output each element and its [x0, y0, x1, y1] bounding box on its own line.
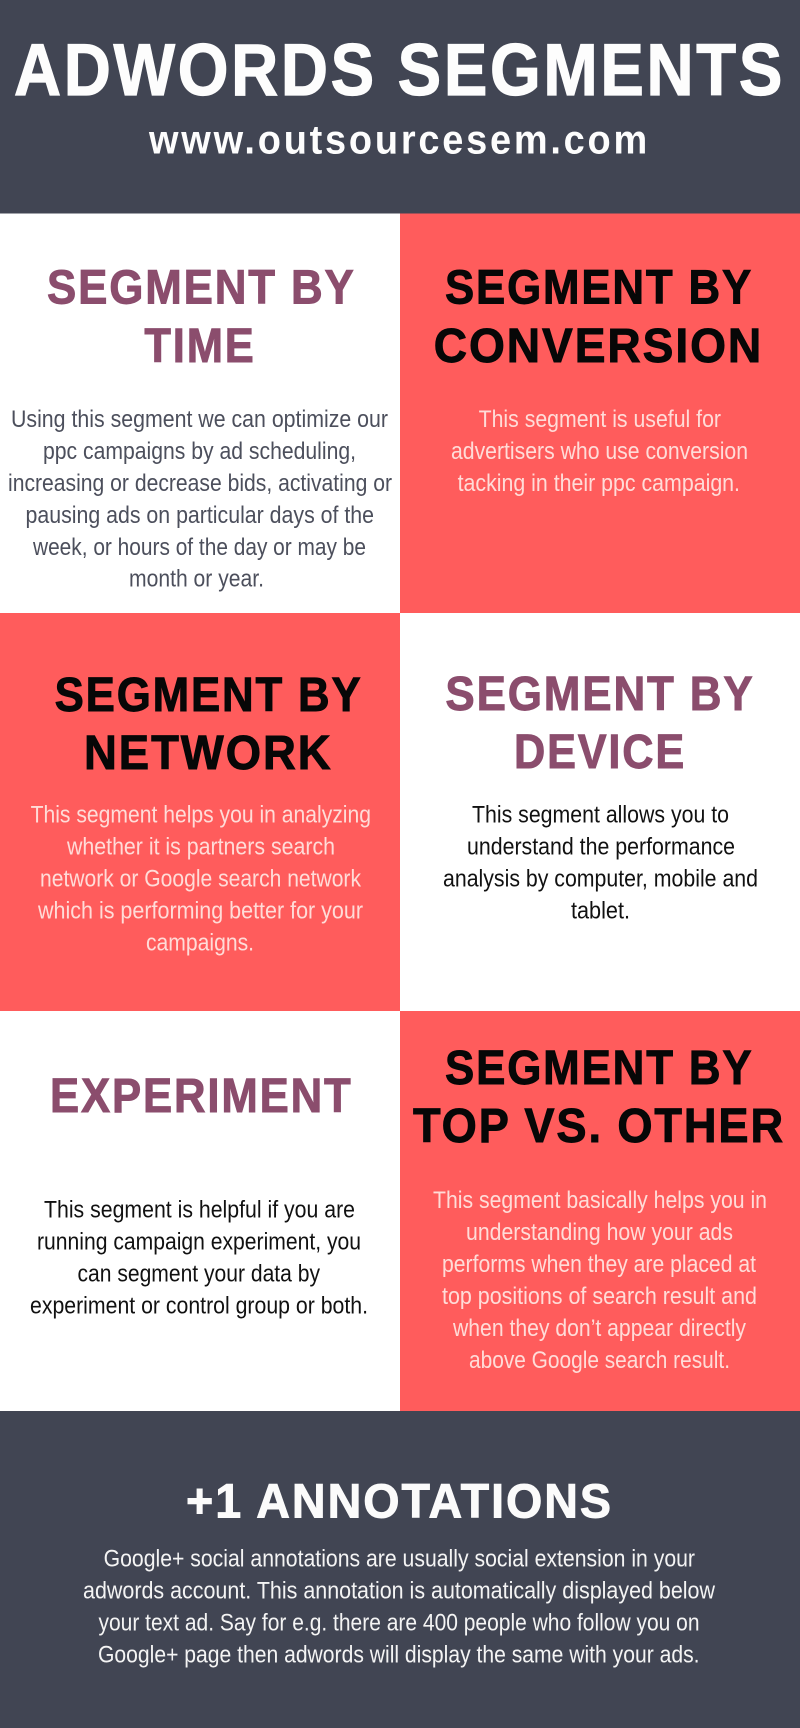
heading: segment by conversion: [434, 262, 763, 373]
text block: segment by time: increasing or decrease bids, activating or: [8, 470, 392, 497]
panel: experiment: [0, 1011, 400, 1411]
text block: +1 annotations: [83, 1546, 716, 1668]
heading: +1 annotations: +1 ANNOTATIONS: [186, 1476, 613, 1529]
heading: segment by time: TIME: [144, 320, 256, 373]
heading: segment by conversion: CONVERSION: [434, 320, 763, 373]
text block: segment by conversion: advertisers who use conversion: [451, 438, 748, 465]
text block: segment by time: week, or hours of the day or may be: [32, 534, 366, 561]
heading: segment by device: DEVICE: [514, 726, 686, 779]
heading: segment by device: SEGMENT BY: [445, 668, 755, 721]
text block: experiment: experiment or control group or both.: [30, 1292, 368, 1320]
text block: segment by time: [8, 406, 392, 592]
heading: segment by network: SEGMENT BY: [55, 669, 363, 722]
panel: segment by time: [0, 214, 400, 613]
text block: +1 annotations: adwords account. This annotation is automatically displayed below: [83, 1578, 716, 1604]
text block: segment by conversion: This segment is useful for: [479, 406, 721, 433]
heading: segment by time: SEGMENT BY: [47, 262, 356, 315]
text block: segment by device: This segment allows you to: [472, 802, 729, 829]
panel: segment by top vs. other: [400, 1011, 800, 1411]
text block: segment by conversion: [451, 406, 748, 497]
panel: segment by device: [400, 613, 800, 1011]
text block: segment by network: campaigns.: [146, 930, 254, 957]
subtitle: website: www.outsourcesem.com: [148, 116, 650, 162]
text block: segment by conversion: tacking in their ppc campaign.: [458, 470, 740, 497]
text block: segment by device: understand the performance: [467, 834, 735, 861]
panel: +1 annotations: [0, 1411, 800, 1728]
text block: segment by top vs. other: above Google search result.: [469, 1347, 730, 1374]
text block: segment by top vs. other: when they don’t appear directly: [452, 1315, 746, 1342]
heading: experiment: EXPERIMENT: [50, 1070, 352, 1123]
text block: experiment: running campaign experiment, you: [37, 1229, 361, 1256]
text block: segment by time: Using this segment we can optimize our: [11, 406, 388, 433]
panel: header: [0, 0, 800, 214]
text block: segment by top vs. other: performs when they are placed at: [442, 1251, 756, 1278]
text block: segment by device: tablet.: [571, 898, 630, 925]
text block: experiment: This segment is helpful if you are: [44, 1197, 355, 1224]
text block: segment by top vs. other: understanding how your ads: [466, 1219, 733, 1246]
text block: segment by network: whether it is partners search: [66, 834, 335, 861]
text block: experiment: can segment your data by: [78, 1261, 320, 1288]
text block: segment by device: [443, 802, 758, 925]
text block: segment by time: month or year.: [129, 566, 264, 592]
text block: segment by network: network or Google search network: [40, 866, 362, 893]
heading: segment by top vs. other: SEGMENT BY: [445, 1042, 754, 1095]
text block: segment by network: [31, 802, 371, 957]
heading: segment by top vs. other: [413, 1042, 785, 1153]
heading: segment by conversion: SEGMENT BY: [445, 262, 753, 315]
text block: segment by network: This segment helps you in analyzing: [31, 802, 371, 829]
text block: +1 annotations: Google+ social annotations are usually social extension in your: [104, 1546, 695, 1573]
text block: segment by time: pausing ads on particular days of the: [26, 502, 374, 529]
heading: segment by top vs. other: TOP VS. OTHER: [413, 1100, 785, 1153]
text block: +1 annotations: your text ad. Say for e.g. there are 400 people who follow you on: [98, 1610, 700, 1636]
text block: segment by top vs. other: This segment basically helps you in: [433, 1187, 767, 1214]
text block: experiment: [30, 1197, 368, 1320]
text block: segment by device: analysis by computer, mobile and: [443, 866, 758, 893]
text block: segment by network: which is performing better for your: [37, 898, 363, 925]
text block: +1 annotations: Google+ page then adwords will display the same with your ads.: [98, 1642, 700, 1668]
heading: segment by network: [55, 669, 363, 780]
heading: segment by time: [47, 262, 356, 373]
text block: segment by top vs. other: [433, 1187, 767, 1374]
panel: segment by conversion: [400, 214, 800, 613]
text block: segment by top vs. other: top positions of search result and: [442, 1283, 757, 1310]
panel: segment by network: [0, 613, 400, 1011]
heading: segment by network: NETWORK: [84, 727, 333, 780]
heading: segment by device: [445, 668, 755, 779]
text block: segment by time: ppc campaigns by ad scheduling,: [43, 438, 356, 465]
